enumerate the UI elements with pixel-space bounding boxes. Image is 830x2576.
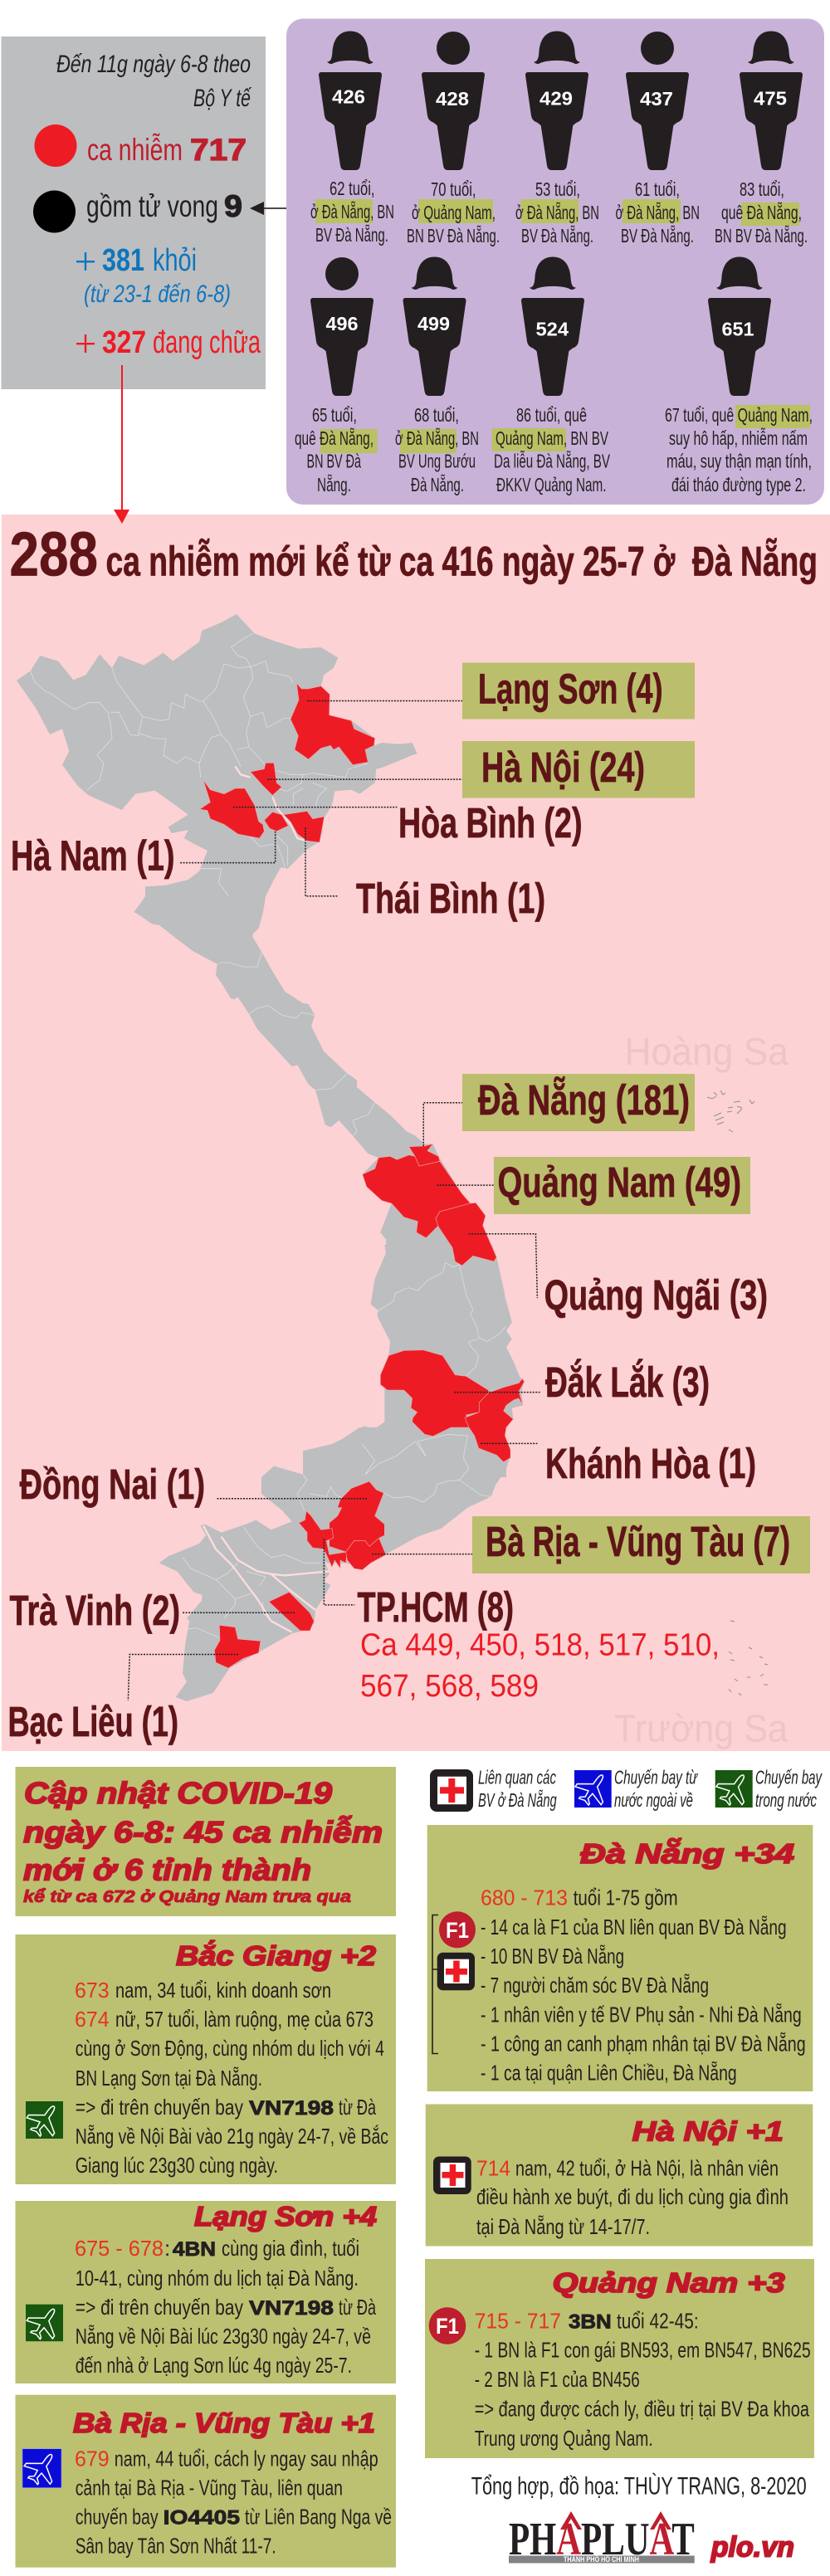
panel: Quảng Nam: 715 - 717	[475, 2309, 561, 2334]
stat: under treatment	[76, 325, 261, 360]
person 429: ở Đà Nẵng, BN	[515, 201, 599, 223]
panel: Quảng Nam: Quảng Nam +3	[553, 2267, 785, 2298]
icon: hospital	[437, 1953, 475, 1990]
person 428: BN BV Đà Nẵng.	[407, 224, 500, 246]
person 437: ở Đà Nẵng, BN	[616, 201, 700, 223]
person 428: 428	[436, 88, 469, 110]
person 496: BN BV Đà	[307, 450, 362, 471]
text: source note: Bộ Y tế	[193, 85, 252, 112]
province: Quảng Ngãi	[436, 1203, 496, 1266]
province: Đắk Lắk	[380, 1350, 490, 1437]
panel: totals	[2, 37, 266, 389]
panel: Bắc Giang	[15, 1934, 396, 2184]
panel: Bắc Giang: VN7198	[249, 2097, 334, 2120]
person 437: 437	[640, 88, 673, 110]
province: Hà Nam	[264, 812, 288, 832]
panel: update header	[15, 1767, 396, 1916]
person 496: quê Đà Nẵng,	[295, 427, 374, 449]
map section: central coast	[134, 896, 505, 1295]
label: Hòa Bình: Hòa Bình (2)	[398, 799, 583, 846]
person 437: 61 tuổi,	[635, 178, 680, 200]
person 524	[494, 257, 610, 495]
arrow: treatment to map	[114, 365, 129, 524]
person 428: 70 tuổi,	[431, 178, 476, 200]
person 499: 499	[417, 313, 450, 334]
person 428: ở Quảng Nam,	[412, 202, 496, 223]
province: Khánh Hòa	[465, 1378, 525, 1462]
person 428	[407, 32, 500, 246]
province: Thái Bình	[284, 811, 325, 842]
arrow: deaths to patient list	[250, 202, 291, 215]
province: Lạng Sơn	[290, 683, 375, 765]
logo: Pháp Luật: plo.vn	[710, 2531, 794, 2563]
panel: Đà Nẵng: Đà Nẵng +34	[580, 1838, 794, 1869]
person 496: 496	[325, 313, 359, 334]
panel: Quảng Nam: tuổi 42-45:	[617, 2309, 699, 2334]
panel: Lạng Sơn: Lạng Sơn +4	[194, 2201, 377, 2232]
person 651	[665, 257, 813, 495]
person 475: 475	[754, 88, 787, 110]
label: Lạng Sơn	[462, 662, 695, 719]
province: Bạc Liêu	[214, 1625, 261, 1668]
label: Quảng Nam: Quảng Nam (49)	[498, 1159, 741, 1206]
stat: recovered	[76, 243, 231, 308]
label: Đồng Nai: Đồng Nai (1)	[20, 1461, 205, 1508]
person 429: 53 tuổi,	[535, 178, 580, 200]
icon: domestic flight	[712, 1766, 756, 1811]
legend: BV ở Đà Nẵng	[478, 1788, 557, 1811]
label: Hoàng Sa: Hoàng Sa	[624, 1030, 788, 1073]
panel: Quảng Nam: 3BN	[569, 2310, 612, 2334]
panel: Bắc Giang: nam, 34 tuổi, kinh doanh sơn	[115, 1978, 331, 2003]
province: TP.HCM	[299, 1511, 347, 1569]
panel: Bà Rịa - Vũng Tàu	[15, 2395, 396, 2568]
heading: 288 new cases: 288	[10, 520, 98, 589]
map section: central highlands	[346, 1245, 525, 1477]
province: Bà Rịa - Vũng Tàu	[346, 1538, 386, 1570]
icon: international flight	[571, 1766, 615, 1811]
person 499: 68 tuổi,	[414, 404, 459, 426]
label: Thái Bình: Thái Bình (1)	[356, 875, 545, 922]
person 426	[310, 32, 394, 246]
panel: Lạng Sơn: 675 - 678	[75, 2236, 164, 2261]
person 524: 524	[536, 319, 569, 340]
panel: Bắc Giang: 673	[75, 1978, 110, 2003]
stat: recovered: khỏi	[153, 243, 197, 278]
panel: Bắc Giang: Giang lúc 23g30 cùng ngày.	[76, 2153, 278, 2178]
map section: north	[17, 614, 417, 1037]
person 651: 651	[722, 319, 754, 340]
panel: Bắc Giang: cùng ở Sơn Động, cùng nhóm du lịch với 4	[76, 2036, 384, 2061]
icon: international flight	[20, 2446, 65, 2491]
person 426: BV Đà Nẵng.	[315, 223, 388, 246]
label: Quảng Nam	[494, 1157, 750, 1214]
stat: total infected: 717	[190, 133, 247, 167]
highlights	[315, 199, 810, 453]
panel: Bà Rịa - Vũng Tàu: nam, 44 tuổi, cách ly ngay sau nhập	[115, 2447, 378, 2471]
panel: Đà Nẵng: - 7 người chăm sóc BV Đà Nẵng	[481, 1973, 709, 1998]
panel: Lạng Sơn: VN7198	[249, 2297, 334, 2320]
panel: Bà Rịa - Vũng Tàu: cảnh tại Bà Rịa - Vũng Tàu, liên quan	[76, 2476, 343, 2500]
province: Quảng Nam	[363, 1155, 471, 1238]
logo: Pháp Luật	[509, 2511, 794, 2565]
panel: Bắc Giang: BN Lạng Sơn tại Đà Nẵng.	[76, 2066, 262, 2091]
panel: Bắc Giang: từ Đà	[339, 2095, 376, 2120]
person 475: 83 tuổi,	[740, 178, 784, 200]
stat: recovered: 381	[102, 243, 144, 278]
icon: Trường Sa islands	[729, 1621, 768, 1695]
panel: Bà Rịa - Vũng Tàu: từ Liên Bang Nga về	[245, 2505, 392, 2530]
label: Lạng Sơn: Lạng Sơn (4)	[478, 666, 662, 713]
map section: south	[159, 1427, 510, 1701]
panel: Đà Nẵng	[427, 1825, 813, 2091]
panel: Bắc Giang: Bắc Giang +2	[176, 1940, 377, 1971]
panel: Lạng Sơn: 10-41, cùng nhóm du lịch tại Đà Nẵng.	[76, 2266, 359, 2291]
icon: Hoàng Sa islands	[707, 1090, 754, 1132]
icon: F1	[439, 1911, 476, 1948]
label: Đà Nẵng	[462, 1074, 695, 1131]
label: Đắk Lắk: Đắk Lắk (3)	[545, 1358, 710, 1406]
person 437	[616, 32, 700, 246]
stat: under treatment: 327	[102, 325, 146, 360]
panel: Lạng Sơn	[15, 2201, 396, 2383]
icon: domestic flight	[22, 2097, 67, 2142]
province: Hòa Bình	[200, 780, 264, 838]
province: Trà Vinh	[269, 1592, 314, 1631]
person 437: BV Đà Nẵng.	[621, 224, 694, 246]
person 524: 86 tuổi, quê	[516, 404, 587, 426]
panel: Bà Rịa - Vũng Tàu: IO4405	[164, 2507, 240, 2530]
panel: Hà Nội: 714	[476, 2156, 510, 2181]
panel: Bà Rịa - Vũng Tàu: chuyến bay	[76, 2505, 159, 2530]
panel: Lạng Sơn: đến nhà ở Lạng Sơn lúc 4g ngày 25-7.	[76, 2353, 352, 2378]
text: source note	[56, 51, 252, 112]
person 524: ĐKKV Quảng Nam.	[496, 474, 606, 495]
person 496	[295, 257, 374, 495]
panel: Hà Nội: tại Đà Nẵng từ 14-17/7.	[476, 2214, 650, 2239]
panel: Đà Nẵng: - 10 BN BV Đà Nẵng	[481, 1944, 624, 1969]
label: TP.HCM: Ca 449, 450, 518, 517, 510,	[360, 1628, 720, 1663]
person 524: Da liễu Đà Nẵng, BV	[494, 450, 610, 471]
panel: Bà Rịa - Vũng Tàu: Sân bay Tân Sơn Nhất 11-7.	[76, 2534, 276, 2559]
stat: deaths	[33, 189, 242, 232]
icon: F1	[429, 2307, 466, 2344]
panel: Đà Nẵng: tuổi 1-75 gồm	[574, 1886, 678, 1910]
icon: hospital	[430, 1769, 473, 1812]
label: TP.HCM: 567, 568, 589	[360, 1669, 539, 1704]
person 524: Quảng Nam, BN BV	[496, 427, 608, 449]
person 496: Nẵng.	[317, 473, 351, 495]
panel: Lạng Sơn: => đi trên chuyến bay	[76, 2295, 243, 2320]
panel: Bà Rịa - Vũng Tàu: 679	[75, 2447, 110, 2471]
label: Hà Nội: Hà Nội (24)	[481, 744, 645, 791]
stat: deaths: gồm tử vong	[86, 189, 218, 223]
person 475	[715, 32, 808, 246]
legend	[430, 1766, 823, 1812]
label: Khánh Hòa: Khánh Hòa (1)	[545, 1440, 756, 1487]
icon: F1: F1	[436, 2314, 459, 2339]
panel: pink map background	[2, 515, 830, 1751]
person 426: 426	[332, 86, 365, 108]
label: TP.HCM	[357, 1583, 720, 1704]
person 496: 65 tuổi,	[312, 404, 357, 426]
panel: Bà Rịa - Vũng Tàu: Bà Rịa - Vũng Tàu +1	[73, 2408, 375, 2438]
icon: F1: F1	[446, 1918, 469, 1943]
label: Đà Nẵng: Đà Nẵng (181)	[478, 1076, 690, 1124]
map: Vietnam	[17, 614, 540, 1701]
province: Đà Nẵng	[409, 1144, 440, 1166]
panel: deceased patients	[286, 18, 824, 505]
label: TP.HCM: TP.HCM (8)	[357, 1583, 514, 1631]
panel: update header: Cập nhật COVID-19	[24, 1776, 332, 1810]
province: Hà Nội	[251, 763, 281, 795]
stat: deaths: 9	[224, 189, 242, 223]
label: Trà Vinh: Trà Vinh (2)	[10, 1587, 180, 1634]
panel: Đà Nẵng: 680 - 713	[481, 1886, 568, 1910]
person 426: ở Đà Nẵng, BN	[310, 200, 394, 222]
panel: update header: mới ở 6 tỉnh thành	[23, 1853, 311, 1887]
person 499	[395, 257, 479, 495]
person 426: 62 tuổi,	[330, 178, 375, 199]
panel: Hà Nội: Hà Nội +1	[632, 2116, 784, 2146]
stat: total infected	[35, 124, 247, 167]
person 499: Đà Nẵng.	[411, 473, 464, 495]
panel: Bắc Giang: Nẵng về Nội Bài vào 21g ngày 24-7, về Bắc	[76, 2124, 388, 2149]
stat: under treatment: đang chữa	[153, 325, 261, 360]
panel: Quảng Nam	[425, 2259, 814, 2458]
logo: Pháp Luật: PHAPLUAT	[509, 2514, 695, 2565]
stat: recovered: (từ 23-1 đến 6-8)	[84, 281, 231, 308]
panel: update header: ngày 6-8: 45 ca nhiễm	[23, 1815, 383, 1849]
panel: Quảng Nam: - 2 BN là F1 của BN456	[475, 2367, 640, 2392]
stat: total infected: ca nhiễm	[87, 133, 183, 167]
legend: Chuyến bay từ	[614, 1766, 698, 1788]
panel: Lạng Sơn: :	[164, 2236, 170, 2261]
panel: update header: kể từ ca 672 ở Quảng Nam trưa qua	[23, 1888, 351, 1906]
legend: Liên quan các	[478, 1766, 556, 1788]
legend: nước ngoài về	[614, 1789, 693, 1811]
person 499: BV Ung Bướu	[398, 450, 476, 471]
province: Đồng Nai	[330, 1481, 384, 1552]
text: source note: Đến 11g ngày 6-8 theo	[56, 51, 251, 78]
panel: Bắc Giang: nữ, 57 tuổi, làm ruộng, mẹ của 673	[115, 2007, 374, 2032]
label: Trường Sa: Trường Sa	[614, 1707, 788, 1750]
panel: Lạng Sơn: Nẵng về Nội Bài lúc 23g30 ngày 24-7, về	[76, 2324, 371, 2349]
panel: Quảng Nam: Trung ương Quảng Nam.	[475, 2426, 653, 2451]
label: Hà Nam: Hà Nam (1)	[11, 832, 174, 880]
panel: Bắc Giang: 674	[75, 2007, 110, 2032]
icon: hospital	[433, 2156, 471, 2194]
person 499: ở Đà Nẵng, BN	[395, 427, 479, 449]
panel: Bắc Giang: => đi trên chuyến bay	[76, 2095, 243, 2120]
panel: Đà Nẵng: - 1 ca tại quận Liên Chiều, Đà Nẵng	[481, 2061, 737, 2086]
panel: Lạng Sơn: cùng gia đình, tuổi	[222, 2236, 359, 2261]
panel: Lạng Sơn: 4BN	[173, 2238, 216, 2261]
panel: Lạng Sơn: từ Đà	[339, 2295, 376, 2320]
logo: Pháp Luật: THÀNH PHỐ HỒ CHÍ MINH	[564, 2554, 639, 2564]
heading: 288 new cases	[10, 520, 818, 589]
icon: domestic flight	[22, 2300, 67, 2344]
person 429	[515, 32, 599, 246]
person 429: 429	[540, 88, 573, 110]
person 429: BV Đà Nẵng.	[521, 224, 593, 246]
label: Bạc Liêu: Bạc Liêu (1)	[8, 1698, 178, 1745]
panel: Hà Nội	[426, 2105, 813, 2246]
